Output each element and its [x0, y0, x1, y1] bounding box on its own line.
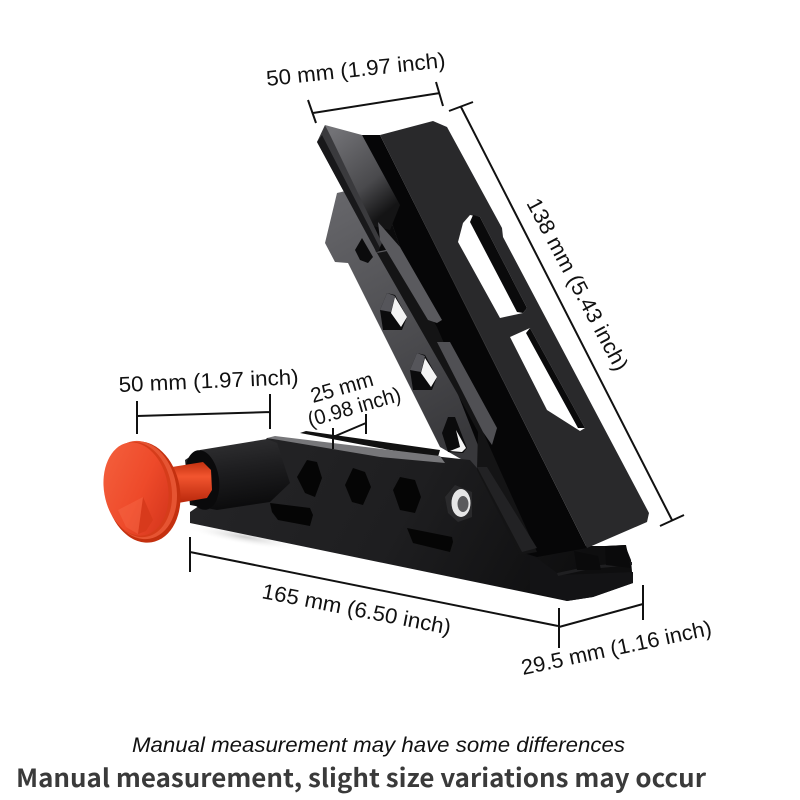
lower grey side plate with holes [325, 190, 500, 470]
base body with foot [190, 431, 633, 601]
dimension: base length 165 mm: 165 mm (6.50 inch) [260, 579, 453, 640]
dimension: knob length 50 mm [118, 365, 299, 434]
dimension: top width 50 mm [265, 48, 447, 123]
caption: bold size variation note: Manual measurement, slight size variations may occur [16, 759, 706, 795]
top plate: textured face with slots [380, 121, 649, 548]
note: english italic: Manual measurement may have some differences [132, 733, 625, 757]
base holes [270, 460, 453, 552]
dimension: base depth 29.5 mm: 29.5 mm (1.16 inch) [519, 616, 714, 680]
cylinder [181, 439, 290, 512]
dimension: top width 50 mm: 50 mm (1.97 inch) [265, 48, 447, 91]
dimension: rail width 25 mm: 25 mm [308, 368, 376, 408]
product: folding bracket [96, 121, 649, 601]
dimension: rail width 25 mm [305, 368, 404, 449]
dimension: height 138 mm: 138 mm (5.43 inch) [522, 194, 633, 375]
red knob [96, 435, 212, 549]
top plate: rail, strips and channel [317, 125, 587, 557]
socket screw [445, 485, 472, 522]
dimension: base depth 29.5 mm [519, 585, 714, 680]
dimension: base length 165 mm [190, 537, 558, 640]
dimension: knob length 50 mm: 50 mm (1.97 inch) [118, 365, 299, 397]
dimension: height 138 mm [449, 102, 684, 526]
floor shadow [185, 519, 305, 555]
dimension: rail width 25 mm: (0.98 inch) [305, 383, 404, 432]
